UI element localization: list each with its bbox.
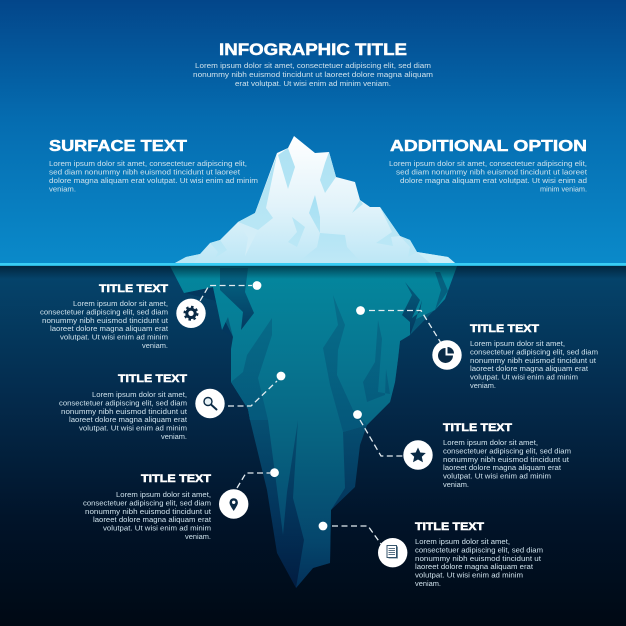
surface description: sed diam nonummy nibh euismod tincidunt ut laoreet (49, 168, 241, 176)
right crack (402, 282, 422, 335)
right 2 description: veniam. (443, 480, 469, 489)
left 1 description: volutpat. Ut wisi enim ad minim (60, 333, 168, 342)
left 3 description: consectetuer adipiscing elit, sed diam (83, 498, 211, 507)
connector: search (228, 372, 285, 406)
right 3 heading: TITLE TEXT (415, 521, 484, 533)
surface description (49, 159, 258, 194)
left block 2 (59, 373, 188, 441)
left 1 description: Lorem ipsum dolor sit amet, (73, 299, 168, 308)
right 1 description: volutpat. Ut wisi enim ad minim (470, 373, 578, 382)
iceberg above water (175, 136, 455, 263)
surface description: Lorem ipsum dolor sit amet, consectetuer adipiscing elit, (49, 159, 247, 168)
right 1 description: nonummy nibh euismod tincidunt ut (470, 356, 597, 365)
right 2 description (443, 438, 571, 489)
main description: nonummy nibh euismod tincidunt ut laoreet dolore magna aliquam (193, 70, 433, 79)
left 2 heading: TITLE TEXT (118, 373, 187, 385)
icon: magnifier (195, 389, 225, 418)
icon: document (378, 538, 407, 567)
right 2 description: consectetuer adipiscing elit, sed diam (443, 446, 571, 455)
right 1 description: Lorem ipsum dolor sit amet, (470, 339, 565, 348)
left 3 description (83, 490, 212, 541)
left 1 description: veniam. (142, 341, 168, 350)
right 1 description: veniam. (470, 381, 496, 390)
surface description: veniam. (49, 184, 76, 194)
surface text block (49, 138, 258, 194)
right 3 description (415, 537, 543, 588)
additional option block (389, 138, 588, 194)
connector: document (319, 522, 381, 544)
dark underside of left ledge (184, 287, 233, 337)
additional description: minim veniam. (540, 184, 587, 194)
right 3 description: volutpat. Ut wisi enim ad minim (415, 571, 523, 580)
left 2 description: veniam. (161, 432, 187, 441)
additional heading: ADDITIONAL OPTION (390, 138, 587, 155)
connector: star (353, 410, 405, 456)
main title block (193, 40, 433, 88)
right 1 description (470, 339, 598, 390)
left 1 description: consectetuer adipiscing elit, sed diam (40, 307, 168, 316)
additional description: sed diam nonummy nibh euismod tincidunt ut laoreet (396, 168, 588, 176)
surface description: dolore magna aliquam erat volutpat. Ut wisi enim ad minim (49, 176, 258, 185)
connector: pie chart (356, 306, 441, 343)
right 3 description: veniam. (415, 579, 441, 588)
left 3 description: Lorem ipsum dolor sit amet, (116, 490, 211, 499)
right 1 description: laoreet dolore magna aliquam erat (470, 364, 589, 373)
left block 3 (83, 473, 212, 541)
icon: star (403, 440, 433, 470)
main description: Lorem ipsum dolor sit amet, consectetuer adipiscing elit, sed diam (195, 61, 431, 70)
right block 2 (443, 422, 571, 489)
connector: location (237, 468, 279, 488)
left 2 description: volutpat. Ut wisi enim ad minim (79, 424, 187, 433)
right 1 description: consectetuer adipiscing elit, sed diam (470, 347, 598, 356)
right 2 heading: TITLE TEXT (443, 422, 512, 434)
sky background (0, 0, 626, 264)
water shadow (0, 266, 626, 279)
left 2 description: consectetuer adipiscing elit, sed diam (59, 398, 187, 407)
left 1 heading: TITLE TEXT (99, 283, 168, 295)
surface heading: SURFACE TEXT (49, 138, 187, 155)
left block 1 (40, 283, 169, 350)
right 2 description: volutpat. Ut wisi enim ad minim (443, 472, 551, 481)
left 2 description: Lorem ipsum dolor sit amet, (92, 390, 187, 399)
additional description (389, 159, 588, 194)
berg main teal face (170, 266, 457, 588)
left 2 description: laoreet dolore magna aliquam erat (69, 415, 188, 424)
right 3 description: consectetuer adipiscing elit, sed diam (415, 545, 543, 554)
right 3 description: Lorem ipsum dolor sit amet, (415, 537, 510, 546)
connector: gear (200, 281, 261, 301)
iceberg below water (170, 266, 457, 588)
additional description: Lorem ipsum dolor sit amet, consectetuer adipiscing elit, (389, 159, 587, 168)
left 2 description: nonummy nibh euismod tincidunt ut (61, 407, 188, 416)
left 2 description (59, 390, 188, 441)
central band (323, 295, 367, 432)
icon: gear (176, 299, 206, 328)
waterline (0, 263, 626, 266)
left band (231, 318, 272, 420)
main heading: INFOGRAPHIC TITLE (219, 40, 407, 59)
right band (363, 320, 390, 402)
main description: erat volutpat. Ut wisi enim ad minim veniam. (235, 79, 391, 88)
berg outer silhouette (170, 266, 457, 588)
additional description: dolore magna aliquam erat volutpat. Ut wisi enim ad (400, 176, 587, 185)
right 3 description: laoreet dolore magna aliquam erat (415, 562, 534, 571)
right 1 heading: TITLE TEXT (470, 323, 539, 335)
left 1 description: nonummy nibh euismod tincidunt ut (42, 316, 169, 325)
left 1 description (40, 299, 169, 350)
left 3 heading: TITLE TEXT (141, 473, 211, 485)
right 2 description: laoreet dolore magna aliquam erat (443, 463, 562, 472)
main description (193, 61, 433, 88)
left 3 description: veniam. (185, 532, 211, 541)
right block 1 (470, 323, 598, 390)
left 3 description: volutpat. Ut wisi enim ad minim (103, 524, 211, 533)
right 2 description: nonummy nibh euismod tincidunt ut (443, 455, 570, 464)
right 3 description: nonummy nibh euismod tincidunt ut (415, 554, 542, 563)
icon: location pin (219, 489, 248, 519)
right 2 description: Lorem ipsum dolor sit amet, (443, 438, 538, 447)
upper crack (220, 268, 254, 330)
right block 3 (415, 521, 543, 588)
icon: pie chart (432, 340, 462, 370)
sea background (0, 264, 626, 626)
left 3 description: laoreet dolore magna aliquam erat (93, 515, 212, 524)
left 3 description: nonummy nibh euismod tincidunt ut (85, 507, 212, 516)
left 1 description: laoreet dolore magna aliquam erat (50, 324, 169, 333)
